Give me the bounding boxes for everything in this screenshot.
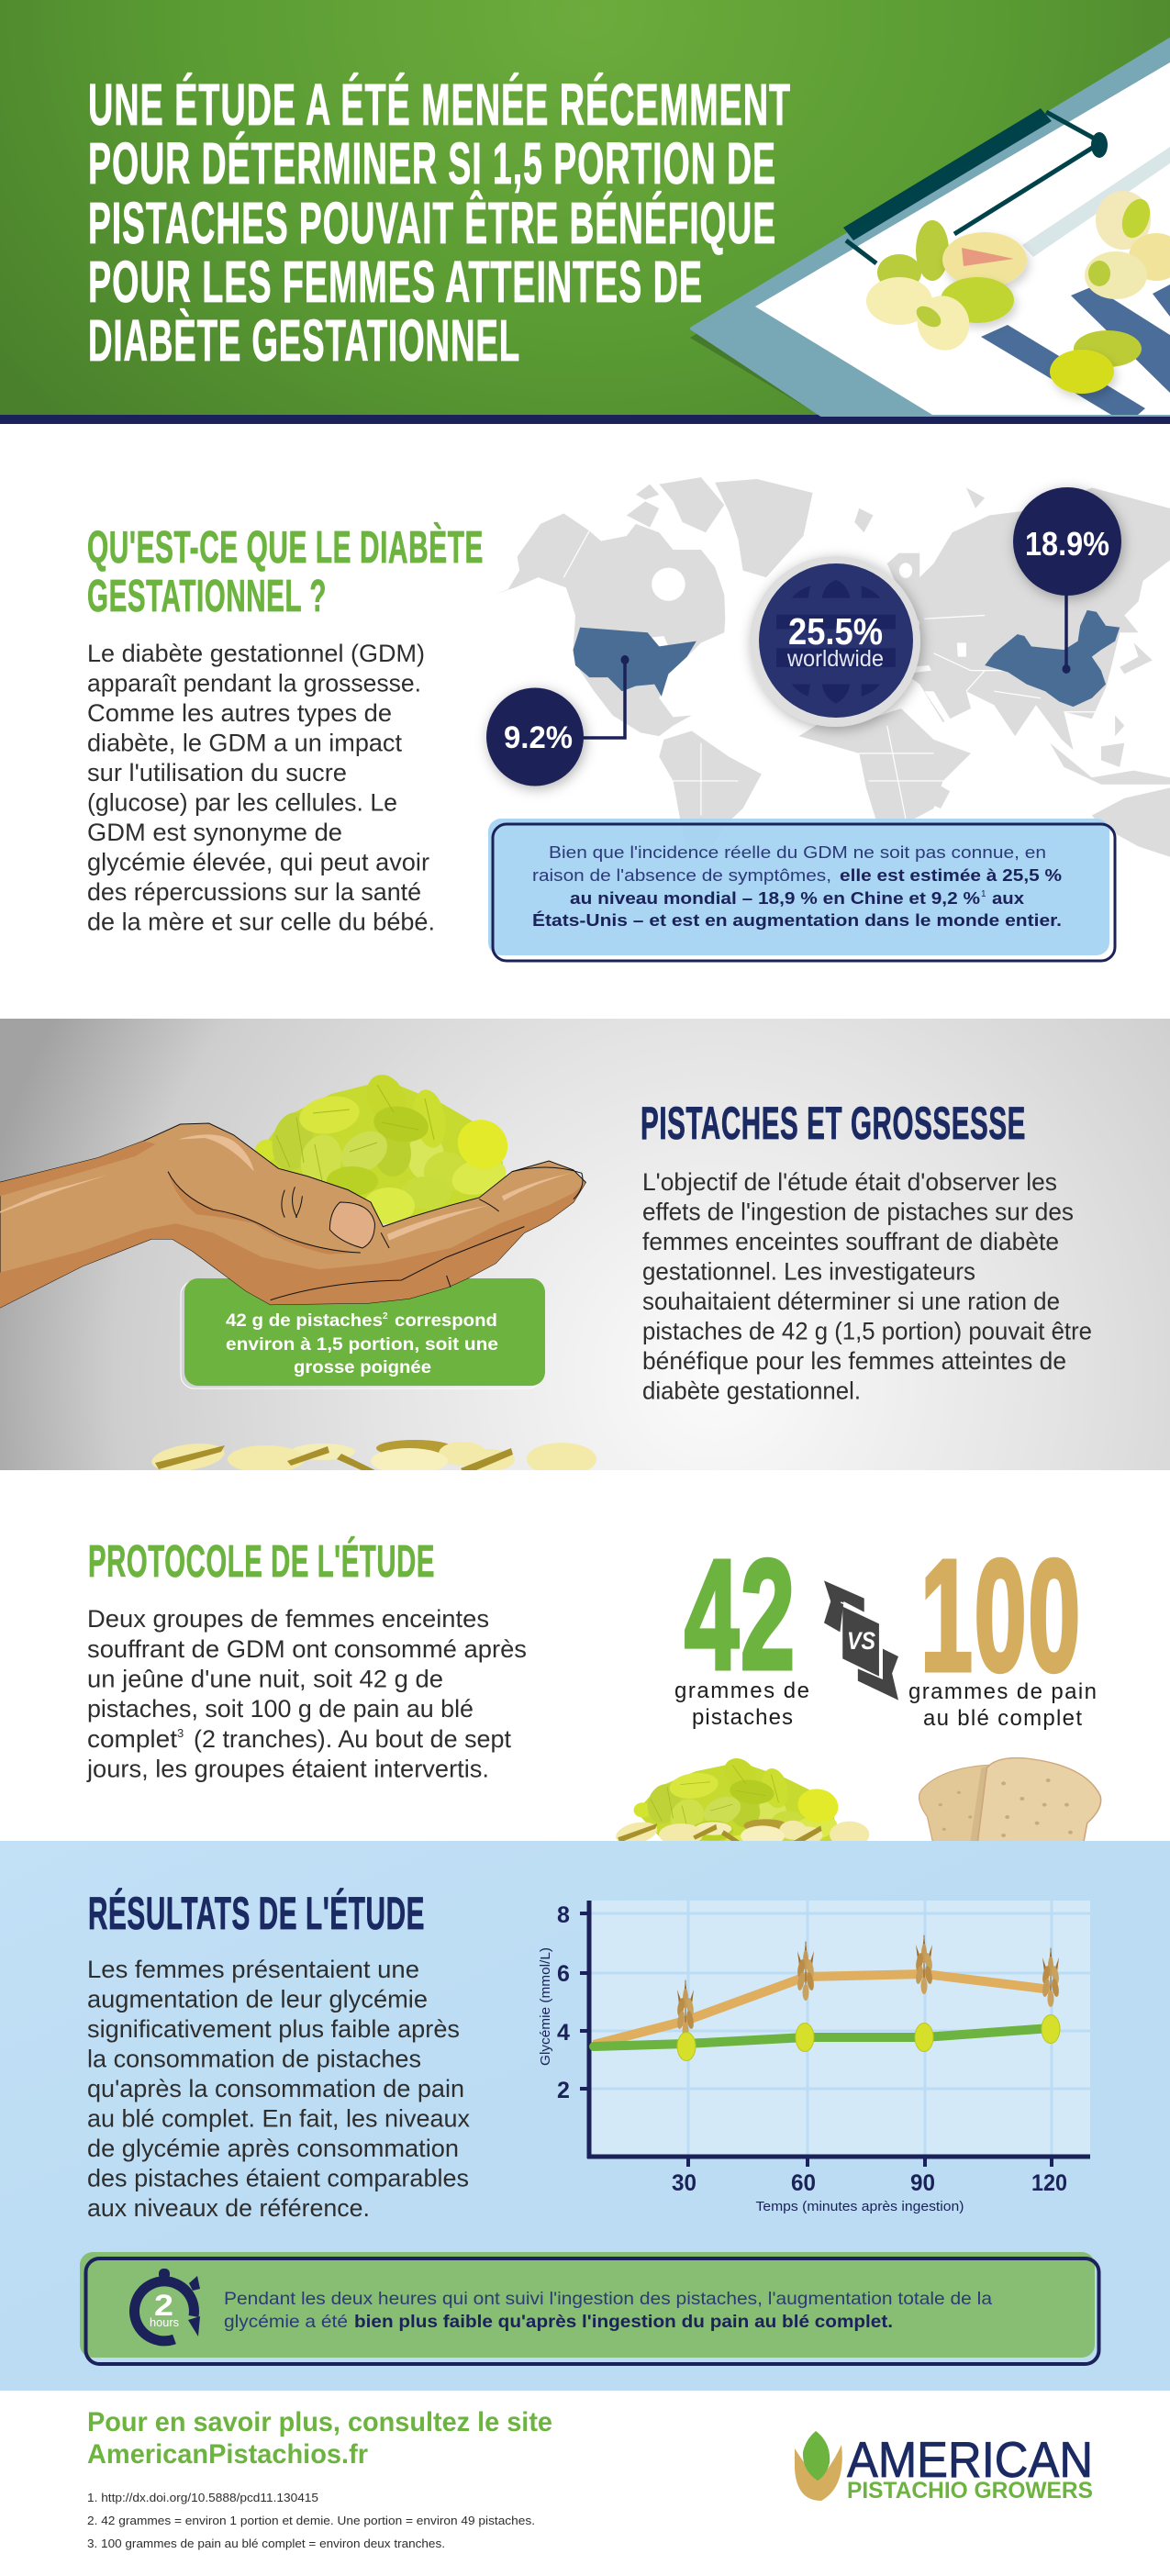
body text: au blé complet. En fait, les niveaux: [87, 2105, 470, 2133]
chart: glycemia over time: 90: [910, 2170, 935, 2196]
body text: (glucose) par les cellules. Le: [87, 789, 397, 817]
footnotes: 2. 42 grammes = environ 1 portion et demie. Une portion = environ 49 pistaches.: [87, 2515, 535, 2527]
callout: incidence text box: Bien que l'incidence réelle du GDM ne soit pas connue, en: [549, 842, 1046, 862]
callout text: Pendant les deux heures qui ont suivi l'ingestion des pistaches, l'augmentation totale de la: [224, 2289, 992, 2309]
chart: glycemia over time: 4: [557, 2020, 570, 2046]
body text: [87, 640, 435, 936]
callout text: [224, 2289, 992, 2332]
icon: stopwatch: 2: [154, 2289, 173, 2322]
body text: gestationnel. Les investigateurs: [642, 1257, 975, 1285]
body text: GDM est synonyme de: [87, 819, 342, 846]
body text: [86, 1605, 527, 1782]
callout: incidence text box: aux: [992, 888, 1025, 908]
chart: glycemia over time: 30: [672, 2170, 696, 2196]
chart: glycemia over time: 120: [1031, 2170, 1067, 2196]
world map: [494, 477, 1170, 857]
heading: PROTOCOLE DE L'ÉTUDE: [88, 1537, 435, 1587]
chart: glycemia over time: 2: [557, 2078, 570, 2103]
body text: [642, 1168, 1092, 1404]
body text: Comme les autres types de: [87, 699, 392, 727]
callout: worldwide 25.5%: 25.5%: [788, 610, 883, 652]
label: 100: au blé complet: [923, 1706, 1082, 1731]
panel: what is gestational diabetes: [87, 477, 1170, 961]
callout: two hours result: [80, 2252, 1099, 2364]
panel: study protocol: [0, 1470, 1170, 1860]
body text: la consommation de pistaches: [87, 2045, 421, 2072]
body text: augmentation de leur glycémie: [87, 1986, 428, 2013]
body text: effets de l'ingestion de pistaches sur des: [642, 1199, 1074, 1226]
icon: pistachio handful: [255, 1068, 518, 1224]
heading: RÉSULTATS DE L'ÉTUDE: [88, 1888, 425, 1939]
body text: qu'après la consommation de pain: [87, 2075, 464, 2102]
map highlight: China: [985, 610, 1120, 707]
chart: glycemia over time: 6: [557, 1961, 570, 1987]
body text: de la mère et sur celle du bébé.: [87, 909, 435, 936]
body text: bénéfique pour les femmes atteintes de: [642, 1347, 1066, 1375]
body text: glycémie élevée, qui peut avoir: [87, 848, 429, 875]
body text: jours, les groupes étaient intervertis.: [86, 1755, 489, 1782]
body text: L'objectif de l'étude était d'observer les: [642, 1168, 1057, 1196]
chart: glycemia over time: Temps (minutes après ingestion): [756, 2199, 964, 2214]
body text: apparaît pendant la grossesse.: [87, 670, 421, 697]
label: 42: pistaches: [692, 1705, 793, 1730]
callout: China 18.9%: 18.9%: [1025, 525, 1109, 563]
portion label box: correspond: [395, 1310, 497, 1331]
callout: incidence text box: États-Unis – et est en augmentation dans le monde entier.: [532, 910, 1062, 930]
icon: pistachios on clipboard: [866, 191, 1170, 394]
call to action: AmericanPistachios.fr: [87, 2439, 368, 2470]
portion label box: environ à 1,5 portion, soit une: [226, 1334, 498, 1355]
body text: Deux groupes de femmes enceintes: [87, 1605, 489, 1633]
callout: incidence text box: 1: [981, 889, 986, 899]
body text: (2 tranches). Au bout de sept: [194, 1725, 512, 1753]
icon: bread: [919, 1758, 1101, 1843]
body text: des pistaches étaient comparables: [87, 2164, 469, 2191]
callout: USA 9.2%: [486, 655, 630, 786]
body text: diabète, le GDM a un impact: [87, 729, 403, 756]
markers: wheat: [676, 1934, 1060, 2039]
body text: 3: [177, 1726, 184, 1740]
chart: glycemia over time: 8: [557, 1902, 570, 1928]
callout text: glycémie a été: [224, 2312, 348, 2332]
chart: glycemia over time: Glycémie (mmol/L): [538, 1947, 553, 2066]
label: 42: grammes de: [674, 1678, 809, 1703]
body text: Le diabète gestationnel (GDM): [87, 640, 425, 667]
logo: American Pistachio Growers: [795, 2431, 1093, 2504]
heading: QU'EST-CE QUE LE DIABÈTE: [87, 523, 484, 573]
body text: diabète gestationnel.: [642, 1377, 861, 1404]
icon: stopwatch: [134, 2269, 200, 2341]
icon: vs ribbon: [824, 1580, 898, 1701]
chart: glycemia over time: [538, 1901, 1090, 2214]
number: 42: 42: [685, 1528, 797, 1702]
icon: hand: [0, 1123, 585, 1308]
footnotes: [87, 2492, 535, 2550]
body text: pistaches de 42 g (1,5 portion) pouvait être: [642, 1318, 1092, 1345]
body text: souffrant de GDM ont consommé après: [87, 1635, 527, 1663]
callout: incidence text box: au niveau mondial – 18,9 % en Chine et 9,2 %: [570, 888, 980, 908]
body text: de glycémie après consommation: [87, 2135, 459, 2162]
callout: China 18.9%: [1013, 487, 1121, 674]
logo: American Pistachio Growers: AMERICAN: [847, 2431, 1093, 2488]
callout: worldwide 25.5%: worldwide: [786, 646, 884, 672]
label: 100: [908, 1679, 1097, 1731]
title: DIABÈTE GESTATIONNEL: [88, 307, 520, 374]
portion label box: grosse poignée: [294, 1357, 431, 1377]
line: pistachios: [594, 2028, 1051, 2046]
label: 100: grammes de pain: [908, 1679, 1097, 1704]
markers: pistachio: [677, 2015, 1060, 2061]
body text: complet: [87, 1725, 178, 1753]
callout: USA 9.2%: 9.2%: [504, 720, 573, 755]
body text: significativement plus faible après: [87, 2015, 460, 2043]
panel: pistachios and pregnancy: [0, 1019, 1170, 1476]
call to action: [87, 2407, 552, 2470]
icon: pistachio pile: [615, 1754, 869, 1860]
portion label box: 42 g de pistaches: [226, 1310, 383, 1331]
logo: American Pistachio Growers: PISTACHIO GROWERS: [847, 2478, 1093, 2504]
body text: aux niveaux de référence.: [87, 2194, 370, 2222]
body text: Les femmes présentaient une: [87, 1956, 419, 1983]
chart: glycemia over time: 60: [791, 2170, 816, 2196]
body text: souhaitaient déterminer si une ration de: [642, 1288, 1060, 1315]
icon: pistachio row: [150, 1440, 596, 1476]
callout: worldwide 25.5%: [750, 556, 920, 727]
body text: un jeûne d'une nuit, soit 42 g de: [87, 1665, 443, 1692]
clipboard illustration: [690, 39, 1170, 415]
footnotes: 3. 100 grammes de pain au blé complet = environ deux tranches.: [87, 2537, 445, 2550]
map highlight: USA: [573, 628, 696, 697]
body text: sur l'utilisation du sucre: [87, 759, 347, 786]
callout: incidence text box: raison de l'absence de symptômes,: [532, 865, 831, 885]
callout: incidence text box: elle est estimée à 25,5 %: [840, 865, 1062, 885]
panel: study results: [0, 1841, 1170, 2391]
footnotes: 1. http://dx.doi.org/10.5888/pcd11.130415: [87, 2492, 318, 2504]
body text: pistaches, soit 100 g de pain au blé: [87, 1695, 474, 1723]
title: [88, 72, 791, 374]
heading: GESTATIONNEL ?: [87, 572, 327, 621]
portion label box: 2: [383, 1311, 388, 1321]
body text: des répercussions sur la santé: [87, 878, 421, 906]
callout: incidence text box: [488, 819, 1115, 961]
call to action: Pour en savoir plus, consultez le site: [87, 2407, 552, 2437]
line: whole wheat bread: [594, 1974, 1051, 2045]
label: 42: [674, 1678, 809, 1730]
panel: header: [0, 0, 1170, 424]
title: POUR LES FEMMES ATTEINTES DE: [88, 249, 703, 315]
body text: femmes enceintes souffrant de diabète: [642, 1228, 1059, 1255]
icon: vs ribbon: VS: [847, 1627, 875, 1655]
icon: stopwatch: hours: [150, 2315, 179, 2329]
heading: [87, 523, 484, 621]
portion label box: [181, 1278, 545, 1388]
body text: [87, 1956, 470, 2222]
callout text: bien plus faible qu'après l'ingestion du pain au blé complet.: [354, 2312, 893, 2332]
panel: footer: [87, 2407, 1093, 2550]
